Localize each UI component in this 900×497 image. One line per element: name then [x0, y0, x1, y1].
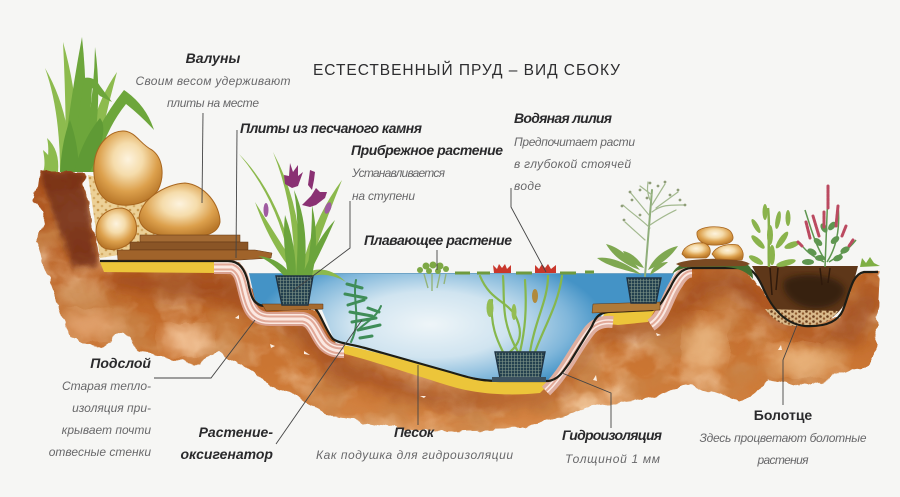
bog gravel [765, 309, 838, 326]
basket: iris [276, 276, 313, 305]
label: water lily [514, 110, 635, 193]
label: floating plant: Плавающее растение [364, 232, 512, 248]
label: bog [700, 407, 867, 467]
label: waterproofing: Гидроизоляция [562, 427, 662, 443]
label: water lily: Водяная лилия [514, 110, 612, 126]
boulders [94, 131, 220, 249]
label: marginal plant: Прибрежное растение [351, 142, 503, 158]
label: oxygenator [180, 424, 273, 462]
label: boulders: Своим весом удерживают [136, 74, 290, 88]
label: bog: Болотце [754, 407, 812, 423]
label: boulders [136, 50, 290, 110]
label: bog: растения [756, 453, 809, 467]
label: underlayer: Подслой [90, 355, 151, 371]
label: waterproofing [562, 427, 662, 466]
soil bank [30, 165, 890, 445]
label: bog: Здесь процветают болотные [700, 431, 867, 445]
label: oxygenator: Растение- [199, 424, 273, 440]
bog soil [752, 266, 858, 326]
label: boulders: Валуны [186, 50, 240, 66]
label: water lily: в глубокой стоячей [514, 157, 631, 171]
label: oxygenator: оксигенатор [180, 446, 273, 462]
rubble behind boulders [88, 175, 165, 258]
label: marginal plant: на ступени [352, 189, 415, 203]
label: boulders: плиты на месте [167, 96, 259, 110]
basket: shore plant [627, 278, 661, 303]
iris flowers [264, 163, 333, 217]
label: waterproofing: Толщиной 1 мм [565, 452, 660, 466]
label: sandstone slabs: Плиты из песчаного камня [240, 120, 422, 136]
label: marginal plant: Устанавливается [351, 166, 446, 180]
soil flecks [235, 315, 782, 398]
label: underlayer: отвесные стенки [49, 445, 151, 459]
plant: bog pink [798, 186, 880, 267]
plant: iris marginal [239, 152, 346, 282]
plant: left grass clump [43, 37, 154, 172]
basket: water lily [492, 352, 546, 382]
label: sand [316, 424, 513, 462]
label: water lily: воде [514, 179, 541, 193]
label: underlayer: крывает почти [62, 423, 151, 437]
sand layers [100, 262, 655, 394]
label: underlayer: изоляция при- [72, 401, 151, 415]
label: water lily: Предпочитает расти [514, 135, 635, 149]
plant: floating [417, 262, 449, 291]
turf and rocks on right bank [672, 227, 753, 279]
water lily flowers and pads [455, 264, 594, 273]
sandstone slabs [117, 235, 272, 260]
underlayer stripes [214, 267, 692, 391]
label: underlayer: Старая тепло- [62, 379, 151, 393]
pond liner [100, 261, 878, 381]
label: sand: Песок [394, 424, 435, 440]
plant: bog green [748, 204, 801, 268]
plant: oxygenator [345, 280, 381, 342]
shelves in pond [262, 302, 660, 313]
plant: sprig with white flowers [597, 181, 686, 276]
label: underlayer [49, 355, 151, 459]
plant: water lily stems [480, 276, 562, 352]
label: marginal plant [351, 142, 503, 203]
title: ЕСТЕСТВЕННЫЙ ПРУД – ВИД СБОКУ [313, 61, 620, 79]
water [249, 274, 674, 381]
leader lines [154, 113, 797, 444]
label: sand: Как подушка для гидроизоляции [316, 448, 513, 462]
